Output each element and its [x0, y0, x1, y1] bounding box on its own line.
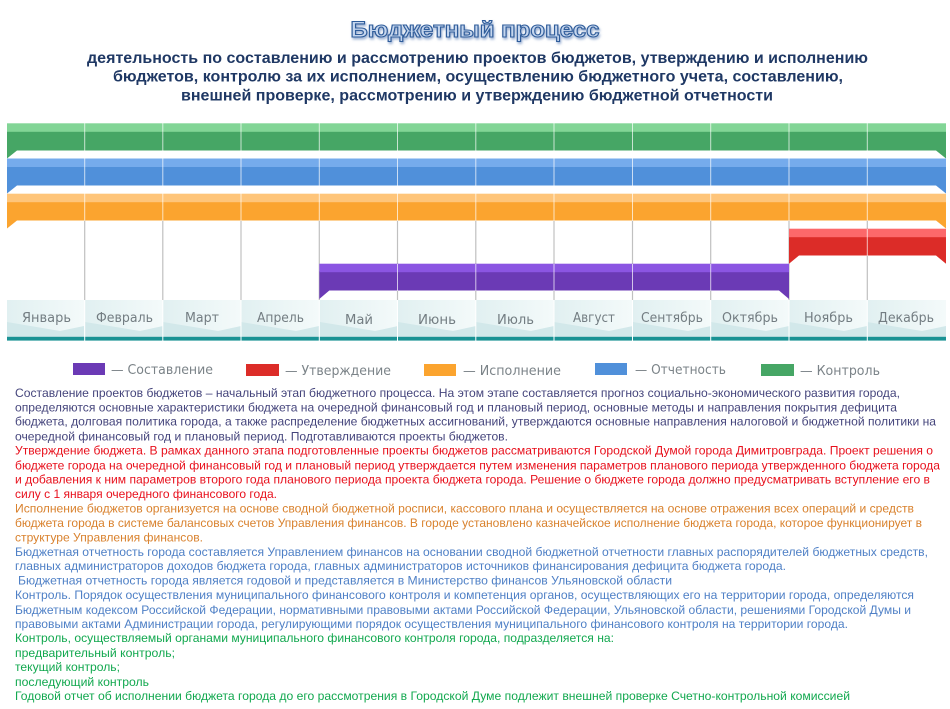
text block: отчетность и контроль: Бюджетным кодексом Российской Федерации, нормативными правовыми актами Российской Федерации, Ульяновской области, решениями Городской Думы и: [15, 603, 911, 617]
text block: отчетность и контроль: [15, 545, 928, 631]
text block: исполнение: Исполнение бюджетов организуется на основе сводной бюджетной росписи, кассового плана и осуществляется на основе отражения всех операций и средств: [15, 502, 914, 516]
text block: исполнение: бюджета города в системе балансовых счетов Управления финансов. В городе установлено казначейское исполнение бюджета города, которое функционирует в: [15, 516, 922, 530]
month labels: Март: [185, 311, 219, 326]
legend: исполнение: — Исполнение: [463, 363, 561, 379]
month labels: Сентябрь: [641, 311, 703, 326]
text block: утверждение: Утверждение бюджета. В рамках данного этапа подготовленные проекты бюджетов рассматриваются Городской Думой города Димитровграда. Проект решения о: [15, 444, 933, 458]
legend: утверждение: — Утверждение: [285, 363, 391, 379]
month labels: Декабрь: [878, 311, 934, 326]
month grid lines: [85, 220, 867, 300]
text block: утверждение: силу с 1 января очередного финансового года.: [15, 487, 277, 501]
text block: утверждение: и добавления к ним параметров второго года планового периода проекта бюджета города. Решение о бюджете города должно предусматривать вступление его в: [15, 472, 930, 486]
text block: виды контроля: Контроль, осуществляемый органами муниципального финансового контроля города, подразделяется на:: [15, 631, 614, 645]
legend: отчетность: [595, 362, 726, 378]
month labels: Ноябрь: [804, 311, 853, 326]
month labels: Январь: [22, 311, 71, 326]
text block: виды контроля: Годовой отчет об исполнении бюджета города до его рассмотрения в Городской Думе подлежит внешней проверке Счетно-контрольной комиссией: [15, 689, 850, 703]
legend: исполнение: [424, 363, 561, 379]
text block: составление: Составление проектов бюджетов – начальный этап бюджетного процесса. На этом этапе составляется прогноз социально-экономического развития города,: [15, 386, 900, 400]
legend: контроль: — Контроль: [800, 363, 880, 379]
text block: составление: [15, 386, 936, 444]
text block: отчетность и контроль: Бюджетная отчетность города составляется Управлением финансов на основании сводной бюджетной отчетности главных распорядителей бюджетных средств,: [15, 545, 928, 559]
text block: исполнение: [15, 502, 922, 544]
legend: составление: — Составление: [111, 362, 213, 378]
title: Бюджетный процесс: [350, 17, 600, 42]
text block: виды контроля: предварительный контроль;: [15, 646, 175, 660]
text block: утверждение: [15, 444, 940, 501]
text block: составление: очередной финансовый год и плановый период. Подготавливаются проекты бюджетов.: [15, 430, 508, 444]
text block: виды контроля: текущий контроль;: [15, 660, 120, 674]
text block: отчетность и контроль: Контроль. Порядок осуществления муниципального финансового контроля и компетенция органов, осуществляющих его на территории города, определяются: [15, 588, 914, 602]
bar: составление: [319, 264, 789, 299]
legend: утверждение: [246, 363, 391, 379]
text block: утверждение: бюджете города на очередной финансовый год и плановый период утверждается путем изменения параметров планового периода утвержденного бюджета города: [15, 458, 940, 472]
text block: исполнение: структуре Управления финансов.: [15, 530, 203, 544]
month labels: Октябрь: [722, 311, 778, 326]
gantt chart: [7, 123, 946, 341]
bar: отчетность: [7, 158, 946, 194]
text block: отчетность и контроль: Бюджетная отчетность города является годовой и представляется в Министерство финансов Ульяновской области: [18, 574, 672, 588]
text block: составление: бюджета, долговая политика города, а также распределение бюджетных ассигнований, утверждаются основные направления налоговой и бюджетной политики на: [15, 414, 936, 428]
month dividers over bars: [85, 123, 867, 291]
bar: исполнение: [7, 194, 946, 228]
legend: составление: [73, 362, 213, 378]
month labels: [22, 311, 934, 328]
month labels: Февраль: [96, 311, 153, 326]
subtitle: деятельность по составлению и рассмотрению проектов бюджетов, утверждению и исполнению: [87, 50, 868, 67]
subtitle: бюджетов, контролю за их исполнением, осуществлению бюджетного учета, составлению,: [113, 68, 843, 86]
month labels: Июнь: [418, 313, 456, 328]
month strip: [7, 300, 946, 341]
bar: утверждение: [789, 229, 946, 264]
subtitle: внешней проверке, рассмотрению и утверждению бюджетной отчетности: [181, 88, 773, 104]
subtitle: [87, 50, 868, 104]
bar: контроль: [7, 123, 946, 158]
legend: отчетность: — Отчетность: [635, 362, 726, 378]
legend: контроль: [761, 363, 880, 379]
month labels: Июль: [497, 313, 534, 328]
month labels: Апрель: [257, 311, 304, 326]
text block: отчетность и контроль: главных администраторов доходов бюджета города, главных администраторов источников финансирования дефицита бюджета города.: [15, 559, 786, 573]
text block: отчетность и контроль: правовыми актами Администрации города, регулирующими порядок осуществления муниципального финансового контроля на территории города.: [15, 617, 848, 631]
month labels: Май: [345, 313, 373, 328]
text block: виды контроля: последующий контроль: [15, 675, 149, 689]
legend: [73, 362, 880, 379]
month labels: Август: [573, 311, 615, 326]
text block: составление: определяются основные характеристики бюджета на очередной финансовый год и плановый период, основные методы и направления покрытия дефицита: [15, 400, 897, 414]
text block: виды контроля: [15, 631, 850, 703]
